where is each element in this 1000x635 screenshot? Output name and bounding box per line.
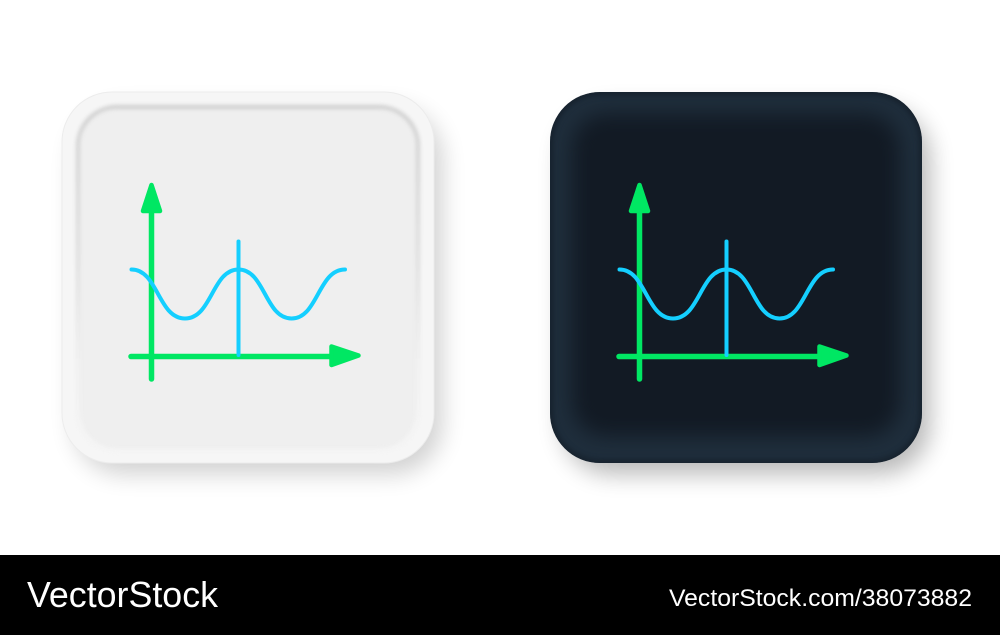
y axis arrowhead (631, 185, 648, 211)
footer bar (0, 555, 1000, 635)
x axis arrowhead (820, 346, 846, 365)
cyan wave (620, 270, 833, 318)
y axis arrowhead (143, 185, 160, 211)
panel: dark button (550, 92, 930, 474)
icon: light wave graph (131, 185, 358, 379)
cyan wave (132, 270, 345, 318)
green axes (131, 212, 335, 379)
brand name: VectorStock (27, 574, 219, 615)
light button inner edge shading (78, 107, 418, 451)
dark button body (550, 92, 922, 463)
green axes (619, 212, 823, 379)
light button body (62, 92, 434, 463)
cyan marker line (236, 242, 240, 355)
dark button shadow (562, 108, 930, 474)
cyan marker line (724, 242, 728, 355)
dark button inner face (550, 92, 922, 463)
icon: dark wave graph (619, 185, 846, 379)
panel: light button (62, 92, 442, 474)
image url: VectorStock.com/38073882 (669, 585, 972, 612)
light button shadow (74, 108, 442, 474)
light button inner face (79, 108, 417, 450)
x axis arrowhead (332, 346, 358, 365)
